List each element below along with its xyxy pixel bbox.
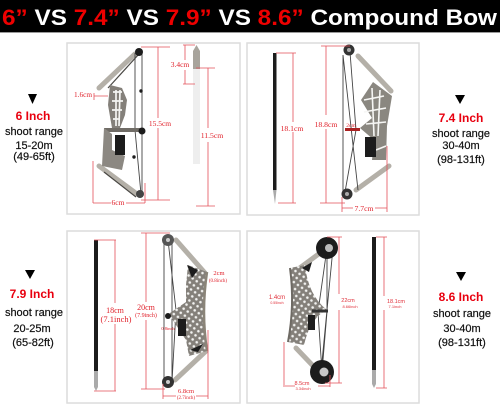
dimension: 7.9 inch measurements: 6.8cm (178, 388, 194, 395)
icon: 7.4 inch bow drawing (342, 44, 392, 200)
label: 6 inch range (5, 94, 63, 163)
label: 6 inch range: (49-65ft) (13, 151, 55, 163)
dimension: 7.9 inch measurements: (7.9inch) (135, 312, 157, 319)
label: 7.9 inch range: 20-25m (13, 323, 51, 335)
icon: 6 inch bow drawing (99, 48, 146, 198)
label: 8.6 inch range (433, 272, 491, 349)
title bar: 6” VS 7.4” VS 7.9” VS 8.6” Compound Bow (2, 5, 498, 30)
label: 7.9 inch range: (65-82ft) (12, 337, 54, 349)
icon: long black arrow (372, 237, 376, 388)
label: 7.4 inch range: 30-40m (442, 140, 480, 152)
label: 7.4 inch range (432, 95, 490, 166)
dimension: bow measurements: 6cm (112, 198, 125, 207)
dimension: arrow measurements: 11.5cm (201, 131, 223, 140)
icon: long black arrow (273, 53, 276, 204)
label: 8.6 inch range: 30-40m (443, 323, 481, 335)
label: 8.6 inch range: shoot range (433, 308, 491, 320)
panel: 7.4 inch bow (247, 43, 419, 215)
dimension: 7.4 inch measurements (276, 46, 387, 213)
dimension: bow measurements: 1.6cm (74, 90, 92, 99)
label: 7.4 inch range: (98-131ft) (437, 154, 485, 166)
panel: 8.6 inch bow (247, 231, 419, 403)
dimension: bow measurements (74, 47, 171, 207)
dimension: 8.6 inch measurements: 18.1cm (387, 299, 405, 305)
dimension: 7.9 inch measurements: (0.8inch) (209, 279, 227, 284)
dimension: 7.9 inch measurements: (2.7inch) (177, 396, 195, 401)
label: 7.4 inch range: shoot range (432, 128, 490, 140)
label: 7.4 inch range: 7.4 Inch (439, 111, 483, 125)
panel: 7.9 inch bow (67, 231, 240, 403)
label: 7.9 inch range (5, 270, 63, 349)
dimension: 7.9 inch measurements: (7.1inch) (101, 314, 132, 324)
label: 7.9 inch range: shoot range (5, 307, 63, 319)
dimension: 7.9 inch measurements: 2cm (213, 270, 225, 277)
dimension: 8.6 inch measurements: 8.5cm (295, 381, 310, 387)
dimension: 7.9 inch measurements: 0.8inch (161, 326, 175, 331)
dimension: bow measurements: 15.5cm (149, 119, 171, 128)
icon: 7.9 inch bow drawing (162, 234, 207, 388)
dimension: 7.9 inch measurements: 18cm (106, 306, 125, 315)
label: 6 inch range: shoot range (5, 126, 63, 138)
dimension: arrow measurements: 3.4cm (171, 60, 189, 69)
dimension: 8.6 inch measurements: 0.55inch (270, 301, 284, 305)
label: 6 inch range: 6 Inch (16, 109, 50, 123)
dimension: 7.4 inch measurements: 18.1cm (281, 124, 303, 133)
label: 8.6 inch range: (98-131ft) (438, 337, 486, 349)
dimension: 8.6 inch measurements: 3.34inch (295, 386, 311, 391)
label: 8.6 inch range: 8.6 Inch (439, 290, 483, 304)
icon: 8.6 inch bow drawing (288, 237, 338, 384)
dimension: 8.6 inch measurements (269, 237, 405, 391)
dimension: 8.6 inch measurements: 22cm (341, 298, 355, 304)
dimension: 8.6 inch measurements: 7.1inch (389, 304, 401, 309)
dimension: 7.4 inch measurements: 2cm (346, 123, 356, 129)
icon: short arrow (193, 45, 200, 164)
dimension: arrow measurements (171, 45, 223, 206)
icon: long black arrow (94, 240, 98, 391)
dimension: 7.9 inch measurements (94, 233, 227, 401)
dimension: 7.9 inch measurements: 20cm (137, 303, 156, 312)
dimension: 8.6 inch measurements: 8.66inch (342, 304, 358, 309)
dimension: 8.6 inch measurements: 1.4cm (269, 295, 285, 301)
panel: 6 inch bow (67, 43, 240, 214)
label: 6 inch range: 15-20m (15, 140, 53, 152)
dimension: 7.4 inch measurements: 7.7cm (354, 204, 374, 213)
dimension: 7.4 inch measurements: 18.8cm (315, 120, 337, 129)
label: 7.9 inch range: 7.9 Inch (10, 287, 54, 301)
